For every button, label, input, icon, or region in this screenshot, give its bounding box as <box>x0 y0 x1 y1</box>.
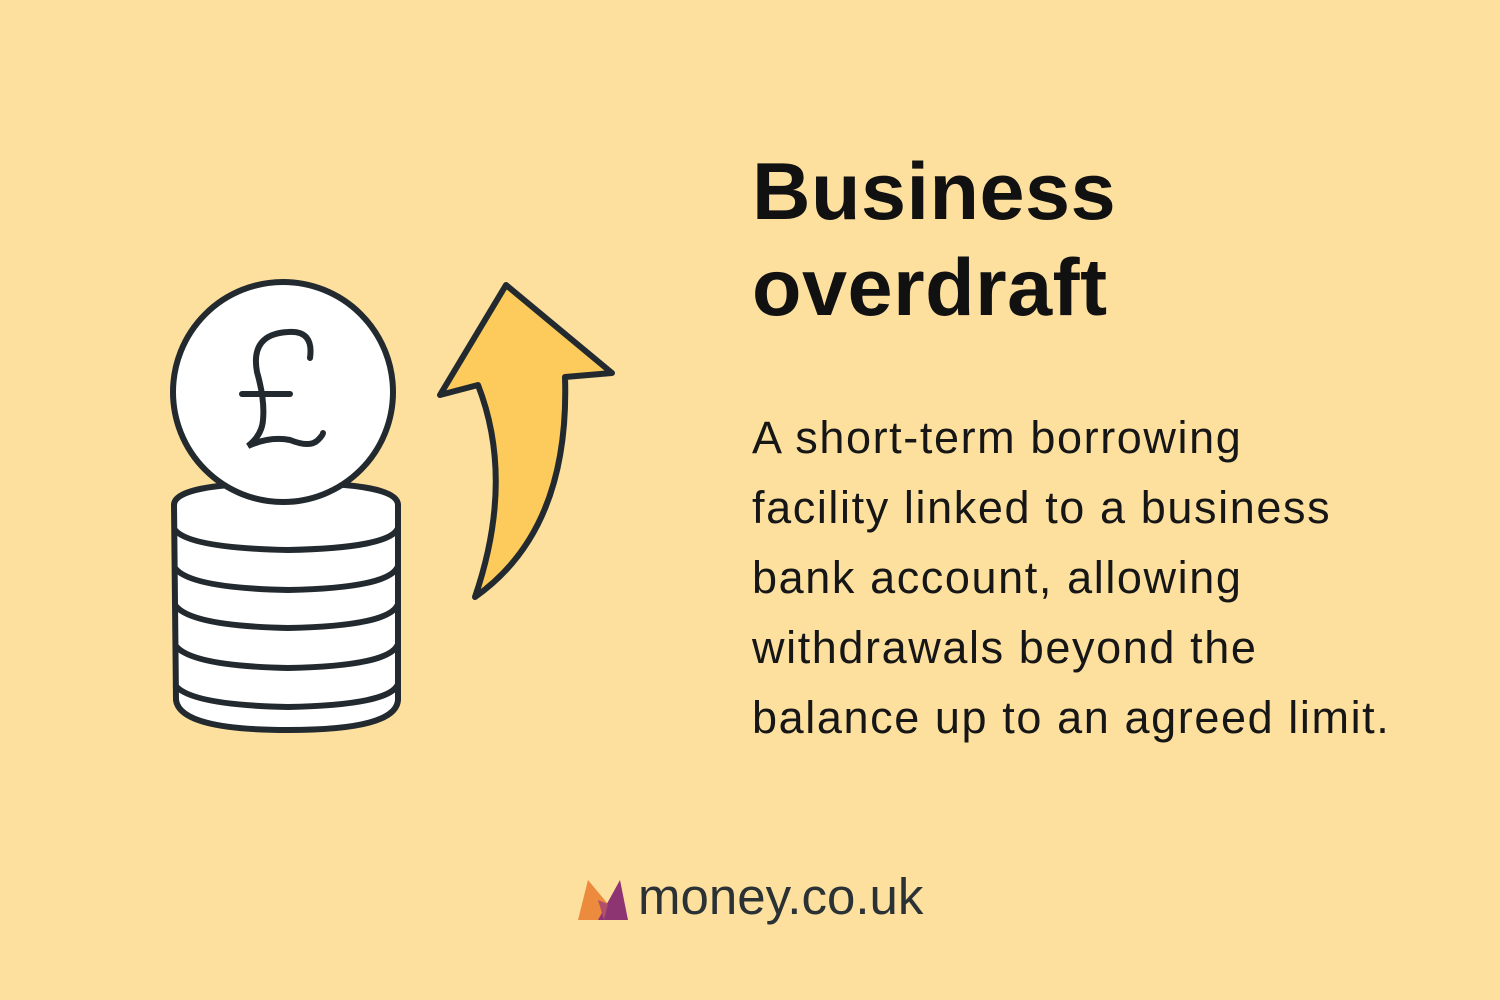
icon: logo mark <box>578 880 628 920</box>
text block: definition: balance up to an agreed limit. <box>752 692 1390 743</box>
text block: definition: facility linked to a business <box>752 482 1331 533</box>
title: overdraft <box>752 243 1108 333</box>
text block: definition: withdrawals beyond the <box>752 622 1257 673</box>
title <box>752 147 1116 333</box>
text block: definition: A short-term borrowing <box>752 412 1242 463</box>
logo text: money.co.uk <box>638 868 923 925</box>
title: Business <box>752 147 1116 237</box>
text block: definition <box>752 412 1390 743</box>
text block: definition: bank account, allowing <box>752 552 1242 603</box>
icon: coin stack <box>174 483 398 730</box>
illustration: coins and arrow <box>170 279 615 733</box>
arrow: upward curved arrow <box>440 285 612 597</box>
icon: pound coin <box>173 282 393 502</box>
logo: money.co.uk <box>578 868 924 925</box>
